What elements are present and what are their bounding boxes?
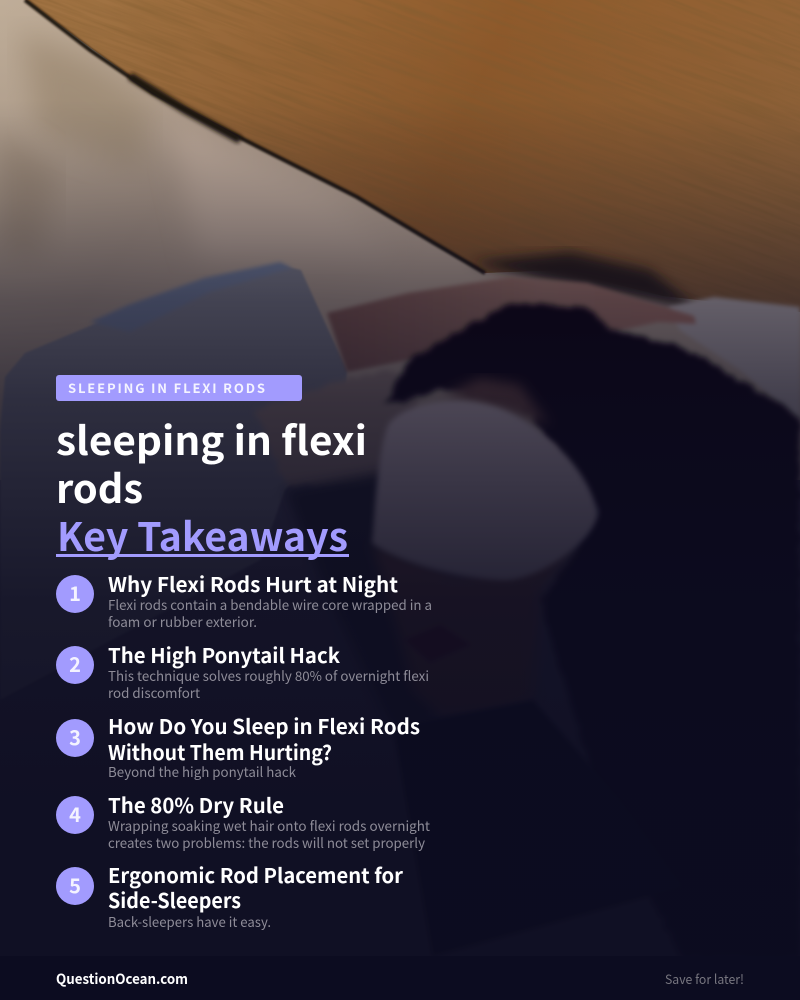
takeaway 3: 3 (69, 722, 81, 751)
category badge: SLEEPING IN FLEXI RODS (68, 378, 265, 397)
takeaway 5: Side-Sleepers (108, 884, 241, 914)
takeaway 5: Ergonomic Rod Placement for (108, 859, 403, 889)
takeaway 2 (56, 639, 429, 702)
takeaway 1: foam or rubber exterior. (108, 611, 257, 631)
takeaway 2: The High Ponytail Hack (108, 639, 341, 669)
background photo: sleeping woman (0, 0, 800, 710)
takeaway 4: The 80% Dry Rule (108, 789, 284, 819)
footer bar: QuestionOcean.com (56, 969, 188, 989)
wood headboard (22, 0, 800, 312)
face (372, 543, 576, 717)
fluffy blanket (255, 368, 420, 490)
takeaway 1: Why Flexi Rods Hurt at Night (108, 568, 398, 598)
takeaway 1: 1 (69, 578, 81, 607)
takeaway 5 (56, 859, 403, 931)
takeaway 1: Flexi rods contain a bendable wire core wrapped in a (108, 594, 432, 614)
takeaway 3: Beyond the high ponytail hack (108, 761, 297, 781)
neck and collar (393, 700, 683, 956)
footer bar: Save for later! (665, 969, 744, 988)
takeaway 4: Wrapping soaking wet hair onto flexi rods overnight (108, 815, 430, 835)
takeaway 3: How Do You Sleep in Flexi Rods (108, 710, 420, 740)
title (56, 411, 367, 563)
takeaway 3 (56, 710, 420, 781)
takeaway 3: Without Them Hurting? (108, 736, 332, 766)
takeaway 1 (56, 568, 432, 631)
hair (385, 303, 800, 960)
takeaway 4 (56, 789, 430, 852)
arm and hand (327, 277, 696, 372)
pillow (0, 0, 800, 480)
takeaway 2: This technique solves roughly 80% of overnight flexi (108, 665, 429, 685)
lips (405, 625, 470, 662)
sleeve (0, 262, 347, 700)
title: rods (56, 459, 143, 515)
forehead (445, 378, 550, 425)
footer bar (0, 956, 800, 1000)
category badge (56, 375, 302, 401)
takeaway 2: rod discomfort (108, 682, 200, 702)
shirt and curls below sleeve (285, 470, 440, 730)
takeaway 4: 4 (69, 799, 81, 828)
right white sheet (668, 297, 800, 420)
takeaway 5: 5 (69, 870, 81, 899)
title: Key Takeaways (57, 507, 348, 563)
takeaway 5: Back-sleepers have it easy. (108, 911, 271, 931)
takeaway 2: 2 (69, 649, 81, 678)
takeaway 4: creates two problems: the rods will not set properly (108, 832, 425, 852)
title: sleeping in flexi (56, 411, 367, 467)
eye mask (372, 401, 597, 580)
